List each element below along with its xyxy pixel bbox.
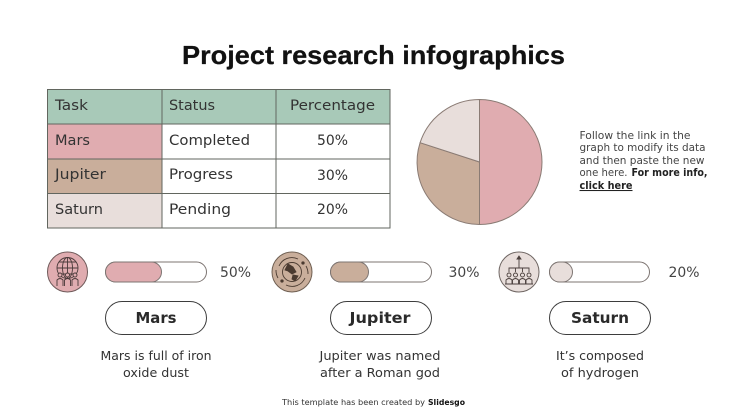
label pill: Jupiter: Jupiter xyxy=(348,309,411,327)
note text: and then paste the new xyxy=(580,155,705,167)
progress bar: 50% xyxy=(106,262,206,282)
note text: Follow the link in the xyxy=(580,130,690,142)
table: task status: 20% xyxy=(317,202,348,218)
description: Jupiter was named xyxy=(318,348,440,363)
percentage: 50% xyxy=(220,265,251,281)
table: task status: 50% xyxy=(317,133,348,149)
table: task status: Percentage xyxy=(290,98,375,114)
table: task status: 30% xyxy=(317,168,348,184)
icon: globe with people xyxy=(48,252,88,292)
title: Project research infographics xyxy=(182,40,565,70)
note text: For more info, xyxy=(632,167,708,179)
description xyxy=(318,348,440,380)
description: oxide dust xyxy=(123,365,189,380)
note text: one here. xyxy=(580,167,628,179)
panel: Saturn xyxy=(499,252,700,380)
note text: click here xyxy=(580,180,632,192)
icon: earth with orbits xyxy=(272,252,312,292)
table: task status: Pending xyxy=(169,202,231,218)
footer credit: This template has been created by xyxy=(281,398,425,407)
footer credit: Slidesgo xyxy=(428,398,465,407)
table: task status: Task xyxy=(54,98,89,114)
description: of hydrogen xyxy=(561,365,639,380)
table: task status: Completed xyxy=(169,133,250,149)
icon: hierarchy of people xyxy=(499,252,539,292)
table: task status: Mars xyxy=(55,133,90,149)
description: Mars is full of iron xyxy=(100,348,212,363)
table: task status: Jupiter xyxy=(54,167,106,183)
label pill: Mars xyxy=(106,302,206,334)
table: task status: Saturn xyxy=(55,202,103,218)
table: task status xyxy=(48,90,390,228)
label pill: Saturn xyxy=(550,302,650,334)
pie chart xyxy=(417,100,542,224)
description xyxy=(556,348,644,380)
table: task status: Status xyxy=(169,98,215,114)
note text xyxy=(580,130,708,192)
description: It’s composed xyxy=(556,348,644,363)
description xyxy=(100,348,212,380)
panel: Jupiter xyxy=(272,252,480,380)
percentage: 30% xyxy=(448,265,480,281)
note text: graph to modify its data xyxy=(580,142,706,154)
percentage: 20% xyxy=(668,265,700,281)
panel: Mars xyxy=(48,252,251,380)
progress bar: 20% xyxy=(550,262,650,282)
description: after a Roman god xyxy=(320,365,440,380)
progress bar: 30% xyxy=(330,262,432,282)
label pill: Saturn: Saturn xyxy=(571,309,629,327)
label pill: Mars: Mars xyxy=(136,309,176,327)
table: task status: Progress xyxy=(169,167,233,183)
label pill: Jupiter xyxy=(330,302,432,334)
